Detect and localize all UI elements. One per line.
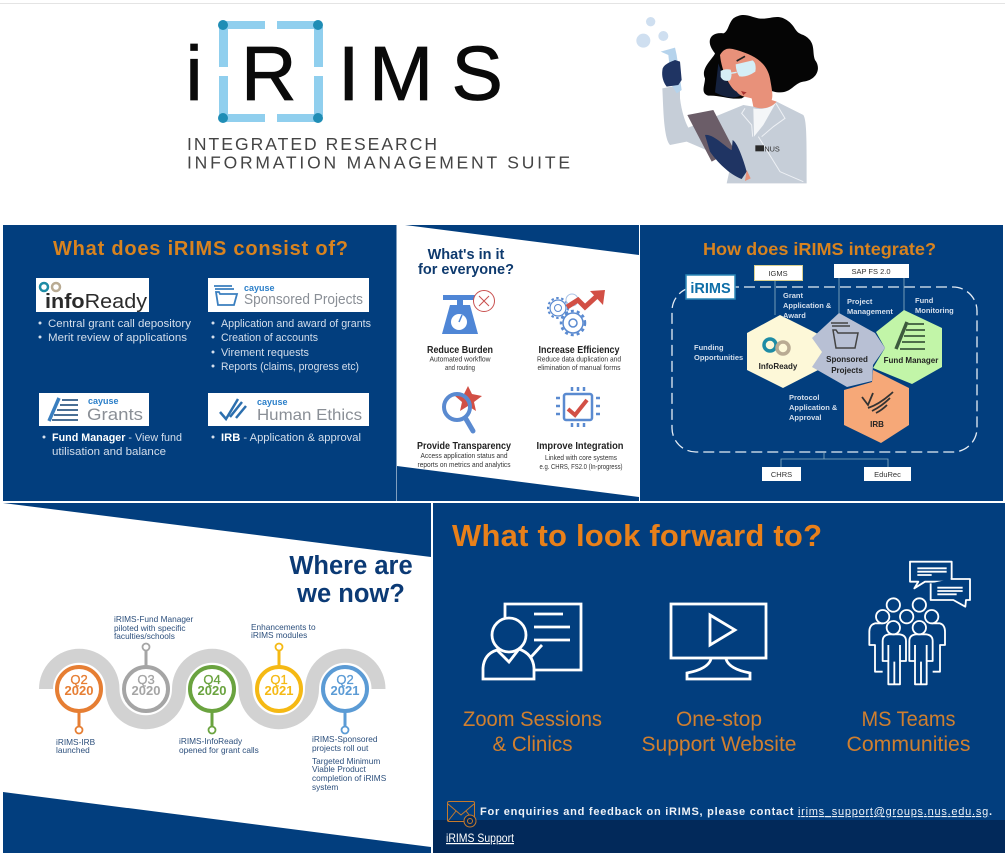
Increase Efficiency text: Increase Efficiency xyxy=(538,345,620,356)
label: Zoom Sessions & Clinics: & Clinics xyxy=(492,733,572,756)
Sponsored Projects features: Application and award of grants xyxy=(221,318,371,330)
Improve Integration text: Linked with core systems xyxy=(545,455,617,462)
hexagon: Sponsored Projects xyxy=(812,313,885,387)
label: One-stop Support Website: One-stop xyxy=(676,708,762,731)
milestone Q4 2020: iRIMS-InfoReady xyxy=(179,736,243,746)
SAP FS 2.0 box xyxy=(834,264,909,278)
milestone Q2 2020 xyxy=(56,667,101,755)
hexagon: Sponsored Projects: Sponsored xyxy=(826,355,868,364)
EduRec box xyxy=(864,467,911,481)
Grants logo: Grants xyxy=(87,405,143,424)
Human Ethics logo xyxy=(208,393,369,426)
hexagon: Sponsored Projects: Projects xyxy=(831,366,863,375)
milestone Q4 2020: 2020 xyxy=(198,683,226,698)
infoReady features: Merit review of applications xyxy=(48,332,188,344)
panel heading: How does iRIMS integrate? xyxy=(703,239,936,259)
Provide Transparency text: reports on metrics and analytics xyxy=(418,462,511,469)
logo tagline xyxy=(187,134,570,172)
label: MS Teams Communities xyxy=(846,708,970,756)
SAP FS 2.0 box: SAP FS 2.0 xyxy=(851,267,891,276)
logo wordmark: i xyxy=(186,31,203,117)
Sponsored Projects logo: cayuse xyxy=(244,283,275,293)
infoReady features xyxy=(38,318,192,344)
panel heading xyxy=(418,247,514,278)
Increase Efficiency text: elimination of manual forms xyxy=(538,365,621,372)
panel heading: Where are xyxy=(289,552,413,580)
milestone Q2 2020: iRIMS-IRB xyxy=(56,737,96,747)
flow labels: Monitoring xyxy=(915,306,954,315)
icon: gears and rising arrow xyxy=(548,290,605,335)
Reduce Burden text: Automated workflow xyxy=(430,356,491,364)
iRIMS badge: iRIMS xyxy=(690,281,731,297)
panel: what's in it for everyone xyxy=(395,225,640,501)
label: MS Teams Communities: Communities xyxy=(846,733,970,756)
contact line: For enquiries and feedback on iRIMS, please contact irims_support@groups.nus.edu.sg. xyxy=(480,806,992,818)
milestone Q2 2020: Q2 xyxy=(70,672,88,687)
panel heading xyxy=(289,552,413,608)
milestone Q4 2020: opened for grant calls xyxy=(179,745,259,755)
flow labels: Management xyxy=(847,307,893,316)
label: MS Teams Communities: MS Teams xyxy=(862,708,956,731)
Improve Integration text: e.g. CHRS, FS2.0 (In-progress) xyxy=(540,464,622,471)
panel: what to look forward to xyxy=(433,503,1005,853)
Improve Integration text: Improve Integration xyxy=(536,441,624,452)
Grants logo xyxy=(39,393,149,426)
hexagon: Fund Manager: Fund Manager xyxy=(884,356,938,365)
panel heading: we now? xyxy=(296,580,405,608)
flow labels: Application & xyxy=(783,301,832,310)
Reduce Burden text: and routing xyxy=(445,365,475,372)
flow labels: Award xyxy=(783,311,806,320)
Sponsored Projects features xyxy=(212,318,371,373)
milestone Q2 2021: completion of iRIMS xyxy=(312,773,387,783)
IGMS box xyxy=(754,266,802,280)
infoReady logo xyxy=(36,278,149,313)
scientist illustration: NUS xyxy=(764,145,780,154)
iRIMS Support link: iRIMS Support xyxy=(446,831,515,845)
milestone Q1 2021: Enhancements to xyxy=(251,622,316,632)
Reduce Burden text: Reduce Burden xyxy=(427,345,493,356)
milestone Q2 2021: 2021 xyxy=(331,683,359,698)
logo frame xyxy=(218,20,323,123)
logo wordmark: R xyxy=(241,31,297,117)
milestone Q3 2020: 2020 xyxy=(132,683,160,698)
logo tagline: INFORMATION MANAGEMENT SUITE xyxy=(187,152,570,172)
Improve Integration text xyxy=(536,441,624,471)
label: Zoom Sessions & Clinics: Zoom Sessions xyxy=(463,708,602,731)
icon: chip with check mark xyxy=(556,387,600,427)
Provide Transparency text: Provide Transparency xyxy=(417,441,511,452)
Provide Transparency text xyxy=(417,441,511,469)
panel: how does iRIMS integrate xyxy=(640,225,1003,501)
Sponsored Projects features: Reports (claims, progress etc) xyxy=(221,361,359,373)
Increase Efficiency text: Reduce data duplication and xyxy=(537,356,621,364)
Human Ethics logo: Human Ethics xyxy=(257,407,362,424)
Provide Transparency text: Access application status and xyxy=(420,453,508,460)
milestone Q4 2020 xyxy=(179,667,259,755)
milestone Q1 2021: 2021 xyxy=(265,683,293,698)
EduRec box: EduRec xyxy=(874,470,901,479)
Fund Manager features: Fund Manager - View fund xyxy=(52,432,182,444)
milestone Q4 2020: Q4 xyxy=(203,672,221,687)
logo tagline: INTEGRATED RESEARCH xyxy=(187,134,437,154)
milestone Q1 2021 xyxy=(251,622,316,711)
label: One-stop Support Website xyxy=(642,708,796,756)
label: Zoom Sessions & Clinics xyxy=(463,708,602,756)
infoReady logo: infoReady xyxy=(45,291,147,313)
Sponsored Projects logo xyxy=(208,278,369,312)
Increase Efficiency text xyxy=(537,345,621,372)
logo wordmark xyxy=(186,31,503,117)
icon: video monitor xyxy=(671,604,766,679)
Sponsored Projects features: Virement requests xyxy=(221,347,309,359)
flow labels: Approval xyxy=(789,413,822,422)
flow labels: Grant xyxy=(783,291,804,300)
milestone Q3 2020: faculties/schools xyxy=(114,631,175,641)
panel heading: for everyone? xyxy=(418,262,514,278)
scientist illustration xyxy=(636,15,818,183)
milestone Q1 2021: Q1 xyxy=(270,672,288,687)
milestone Q2 2021: Q2 xyxy=(336,672,354,687)
milestone Q2 2021 xyxy=(312,667,387,792)
Human Ethics logo: cayuse xyxy=(257,397,288,407)
milestone Q3 2020: iRIMS-Fund Manager xyxy=(114,614,194,624)
icon: envelope xyxy=(448,802,476,827)
icon: weighing scale xyxy=(442,290,494,334)
hexagon: IRB: IRB xyxy=(870,420,884,429)
flow labels: Application & xyxy=(789,403,838,412)
hexagon: InfoReady xyxy=(747,315,822,388)
flow labels: Funding xyxy=(694,343,724,352)
Grants logo: cayuse xyxy=(88,396,119,406)
iRIMS logo xyxy=(186,20,570,172)
CHRS box xyxy=(762,467,801,481)
connector lines xyxy=(775,278,904,467)
flow labels: Project xyxy=(847,297,873,306)
panel heading: What's in it xyxy=(428,247,505,263)
IRB features: IRB - Application & approval xyxy=(221,432,361,444)
panel heading: What to look forward to? xyxy=(452,518,822,553)
milestone Q3 2020: Q3 xyxy=(137,672,155,687)
icon: presenter at board xyxy=(483,604,581,679)
logo wordmark: IMS xyxy=(338,31,503,117)
milestone Q3 2020 xyxy=(114,614,194,711)
panel heading: What does iRIMS consist of? xyxy=(53,238,348,260)
milestone Q2 2021: Targeted Minimum xyxy=(312,756,380,766)
flow labels: Fund xyxy=(915,296,934,305)
footer bar xyxy=(433,820,1005,853)
infoReady features: Central grant call depository xyxy=(48,318,192,330)
flow labels: Opportunities xyxy=(694,353,743,362)
Reduce Burden text xyxy=(427,345,493,372)
milestone Q2 2020: 2020 xyxy=(65,683,93,698)
milestone Q1 2021: iRIMS modules xyxy=(251,630,307,640)
Fund Manager features xyxy=(42,432,182,458)
Fund Manager features: utilisation and balance xyxy=(52,446,166,458)
milestone Q2 2021: projects roll out xyxy=(312,743,369,753)
iRIMS badge xyxy=(686,275,735,299)
milestone Q2 2021: Viable Product xyxy=(312,764,367,774)
panel: where are we now xyxy=(3,503,431,853)
hexagon: Fund Manager xyxy=(873,310,942,384)
flow labels: Protocol xyxy=(789,393,819,402)
dashed iRIMS boundary xyxy=(672,287,977,452)
milestone Q3 2020: piloted with specific xyxy=(114,623,185,633)
IGMS box: IGMS xyxy=(768,269,788,278)
flow labels xyxy=(694,291,954,422)
icon: community and chat bubbles xyxy=(869,562,970,684)
CHRS box: CHRS xyxy=(771,470,792,479)
milestone Q2 2020: launched xyxy=(56,745,90,755)
milestone Q2 2021: system xyxy=(312,782,338,792)
timeline wave xyxy=(46,656,378,722)
icon: magnifier with star xyxy=(444,386,482,431)
milestone Q2 2021: iRIMS-Sponsored xyxy=(312,734,378,744)
Sponsored Projects features: Creation of accounts xyxy=(221,332,318,344)
Sponsored Projects logo: Sponsored Projects xyxy=(244,291,363,308)
hexagon: InfoReady: InfoReady xyxy=(759,362,798,371)
hexagon: IRB xyxy=(844,370,909,443)
panel: what does iRIMS consist of xyxy=(3,225,396,501)
label: One-stop Support Website: Support Website xyxy=(642,733,796,756)
